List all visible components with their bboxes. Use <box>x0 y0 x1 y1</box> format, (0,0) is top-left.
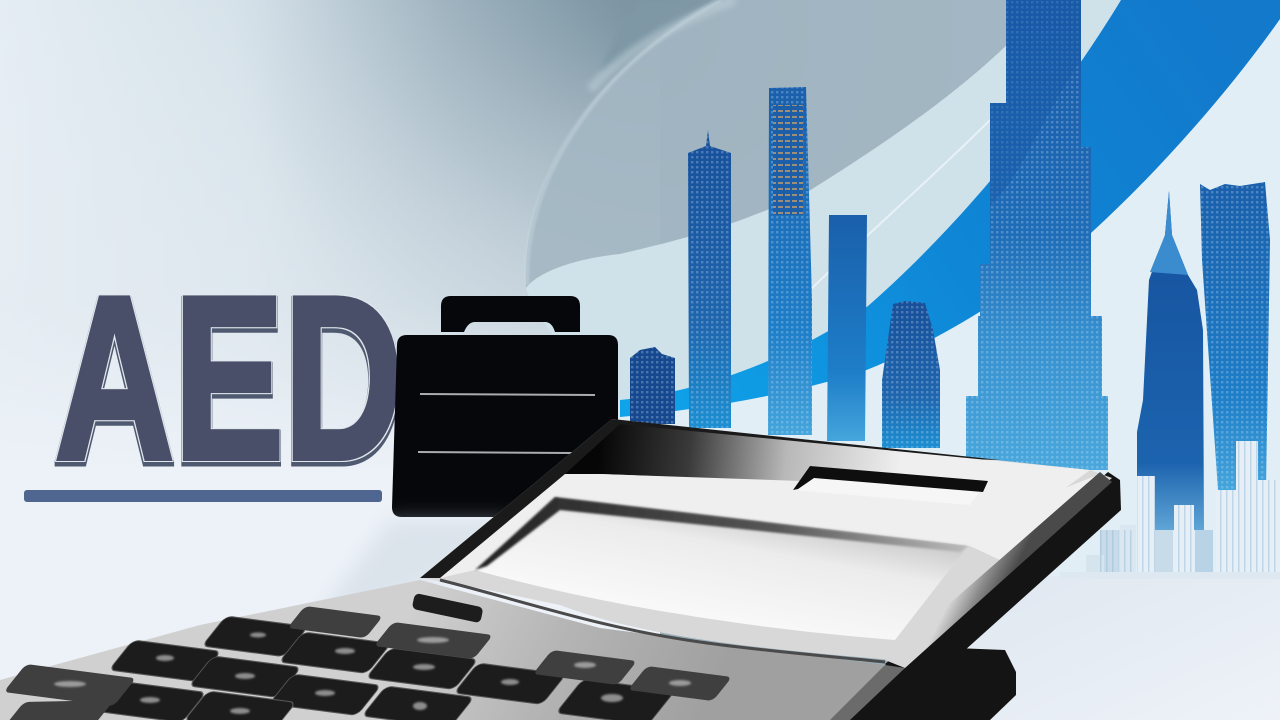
calculator <box>0 419 1121 720</box>
dark keys <box>94 616 675 720</box>
tower: small far left <box>630 347 675 424</box>
calculator face <box>420 419 1112 660</box>
tower: tall slab with lit windows <box>768 87 812 435</box>
face dark hinge edge <box>420 419 1000 578</box>
tower: crown tower far right <box>1200 182 1270 490</box>
calculator shadow <box>300 520 520 640</box>
white foreground buildings <box>1060 441 1280 579</box>
face top gradient <box>565 424 1090 492</box>
briefcase handle <box>441 296 580 332</box>
abstract sky panels and curves <box>526 0 1280 600</box>
underline bar <box>24 490 382 502</box>
main display <box>475 497 968 640</box>
tower: plain slab <box>827 215 867 441</box>
display lower rim <box>440 580 885 662</box>
tower: spire tower <box>688 130 731 428</box>
briefcase body <box>392 335 618 517</box>
tower: pointed right tower <box>1137 191 1204 530</box>
blue rising swoosh <box>620 0 1280 417</box>
briefcase straps <box>418 394 595 453</box>
title: AED lettering: AED <box>55 248 403 508</box>
power slider <box>412 593 483 623</box>
calculator deck <box>0 580 885 720</box>
tower: stepped mid tower <box>882 301 940 448</box>
solar window <box>793 466 988 505</box>
tower: central supertall <box>966 0 1108 470</box>
icon: briefcase <box>392 296 618 517</box>
keypad <box>3 606 732 720</box>
calculator stand <box>835 648 1016 720</box>
skyline <box>630 0 1280 579</box>
key legends <box>54 632 691 714</box>
ground plane <box>960 576 1280 720</box>
upper face band <box>440 474 1100 578</box>
metal rim <box>885 472 1112 668</box>
calculator right edge <box>885 472 1121 695</box>
deck lower edge <box>830 665 905 720</box>
grey keys <box>3 606 732 720</box>
